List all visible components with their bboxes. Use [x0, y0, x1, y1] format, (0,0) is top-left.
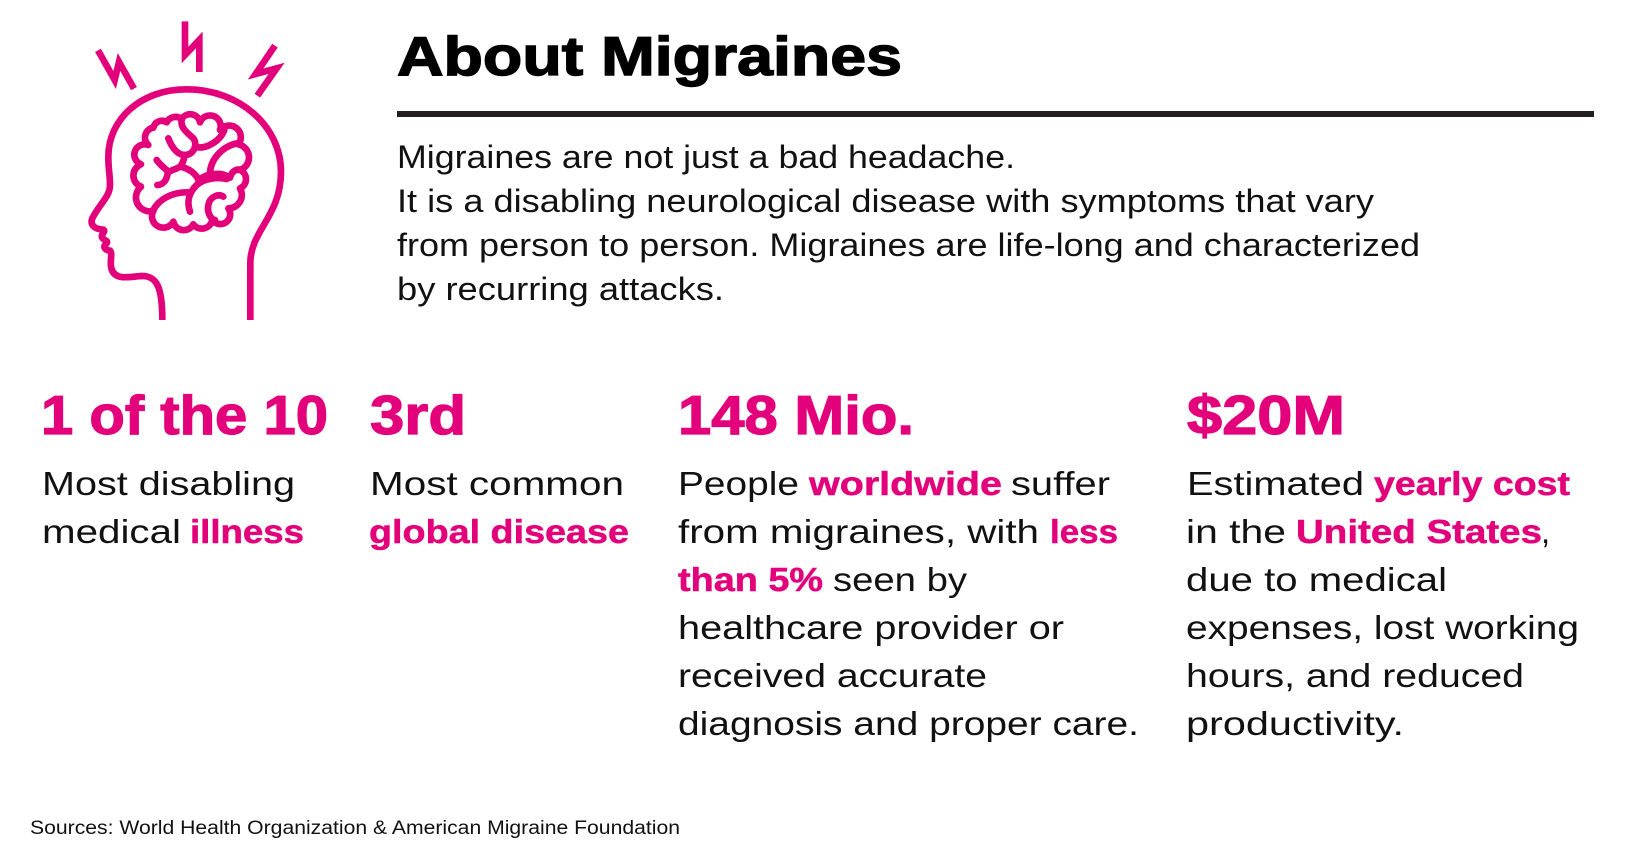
stat description — [1186, 465, 1579, 742]
sources: Sources: World Health Organization & American Migraine Foundation — [30, 818, 680, 839]
text block: intro: by recurring attacks. — [397, 271, 724, 307]
stat description: than 5% — [678, 561, 823, 598]
stat heading: 1 of the 10 — [41, 384, 328, 446]
stat description — [678, 465, 1139, 742]
icon: head outline — [92, 89, 281, 320]
stat description: hours, and reduced — [1186, 657, 1524, 694]
stat description: Most disabling — [42, 465, 295, 502]
stat description: less — [1050, 513, 1118, 550]
stat description: in the — [1186, 513, 1286, 550]
panel: stat 1 of the 10 — [41, 384, 328, 550]
title rule — [397, 111, 1594, 117]
stat description: Most common — [370, 465, 624, 502]
stat heading: 148 Mio. — [678, 384, 914, 446]
stat description: productivity. — [1186, 705, 1404, 742]
text block: intro — [397, 139, 1420, 307]
text block: intro: from person to person. Migraines are life-long and characterized — [397, 227, 1420, 263]
stat description: suffer — [1011, 465, 1110, 502]
stat description: Estimated — [1187, 465, 1364, 502]
stat description: yearly cost — [1374, 465, 1570, 502]
stat description: United States — [1296, 513, 1542, 550]
stat description: diagnosis and proper care. — [678, 705, 1139, 742]
title: About Migraines — [397, 25, 902, 87]
stat description: illness — [190, 513, 304, 550]
stat description: , — [1541, 513, 1550, 550]
stat description: medical — [42, 513, 181, 550]
stat description: seen by — [833, 561, 968, 598]
stat description: People — [678, 465, 799, 502]
panel: stat 3rd — [369, 384, 629, 550]
panel: stat 148 Mio. — [678, 384, 1139, 742]
stat description: from migraines, with — [678, 513, 1039, 550]
stat description — [369, 465, 629, 550]
text block: intro: It is a disabling neurological disease with symptoms that vary — [397, 183, 1374, 219]
stat description: global disease — [369, 513, 629, 550]
text block: intro: Migraines are not just a bad headache. — [397, 139, 1015, 175]
stat description — [42, 465, 304, 550]
stat heading: 3rd — [370, 384, 466, 446]
stat description: due to medical — [1186, 561, 1447, 598]
stat heading: $20M — [1187, 384, 1345, 446]
panel: stat $20M — [1186, 384, 1579, 742]
stat description: worldwide — [808, 465, 1002, 502]
icon: head with brain and lightning bolts — [92, 21, 281, 320]
stat description: received accurate — [678, 657, 987, 694]
stat description: expenses, lost working — [1186, 609, 1579, 646]
icon: lightning bolts — [98, 21, 277, 96]
stat description: healthcare provider or — [678, 609, 1064, 646]
icon: brain — [133, 114, 249, 230]
